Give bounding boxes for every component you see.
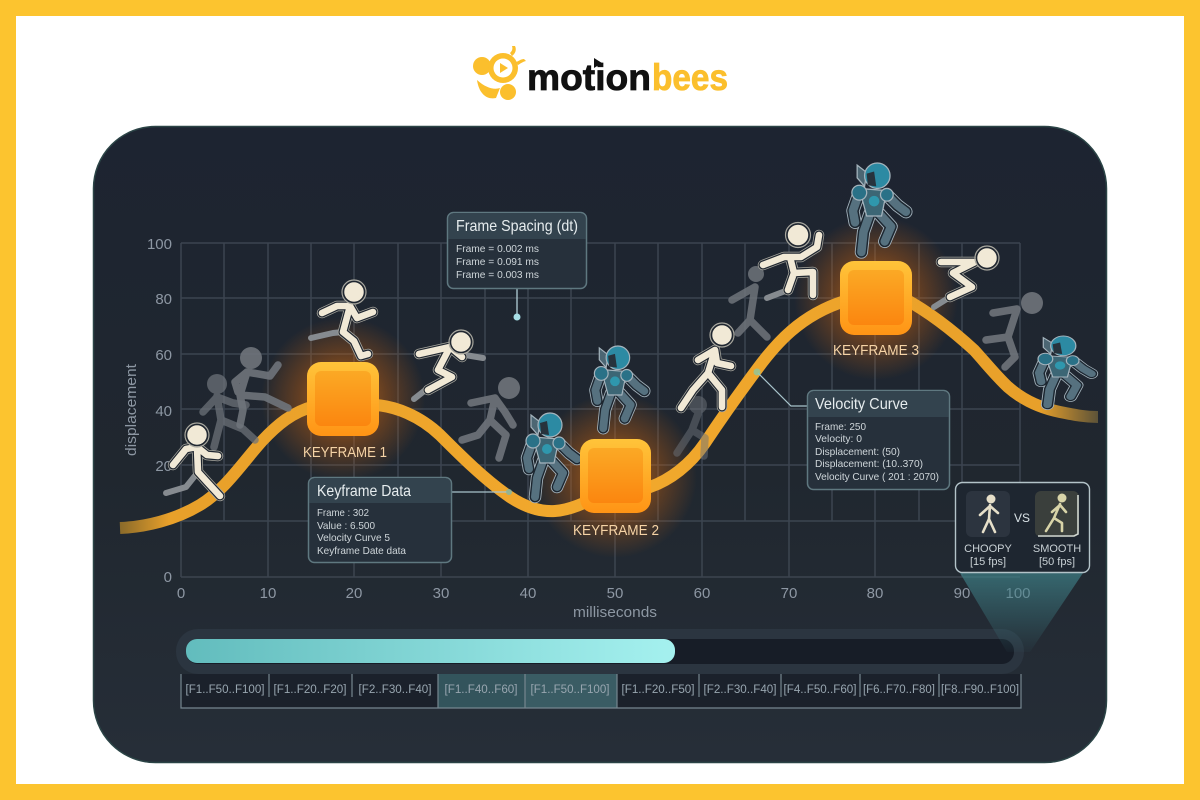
dark chart panel xyxy=(94,126,1106,762)
runner: before keyframe 3 xyxy=(763,222,819,298)
progress track xyxy=(176,629,1024,674)
x axis labels: 10 xyxy=(260,585,276,602)
callout: velocity curve: Velocity Curve xyxy=(815,396,908,413)
logo: motionbees xyxy=(473,46,728,100)
frame range strip: [F1..F50..F100] xyxy=(530,684,610,696)
choppy label: [15 fps] xyxy=(970,556,1006,568)
choppy tile xyxy=(966,491,1010,537)
frame range strip: [F2..F30..F40] xyxy=(704,684,776,696)
callout: keyframe data: Keyframe Data xyxy=(317,483,411,500)
frame range strip: [F1..F40..F60] xyxy=(444,684,518,696)
x axis labels: 60 xyxy=(694,585,710,602)
callout: velocity curve: Frame: 250 xyxy=(815,421,866,433)
keyframe 3 label: KEYFRAME 3 xyxy=(833,342,919,359)
x axis labels xyxy=(177,585,1031,602)
frame range strip: [F1..F50..F100] xyxy=(186,684,264,696)
frame range strip xyxy=(181,674,1021,708)
x axis labels: 50 xyxy=(607,585,623,602)
keyframe glows xyxy=(261,216,958,558)
y axis labels: 60 xyxy=(155,347,172,364)
robot before keyframe 2 xyxy=(526,413,577,497)
y axis labels xyxy=(147,236,172,586)
robot crouching right xyxy=(1038,336,1092,405)
callout: frame spacing xyxy=(448,212,586,320)
y axis labels: 100 xyxy=(147,236,172,253)
ghost runner right xyxy=(986,292,1043,367)
x axis title: milliseconds xyxy=(573,604,657,621)
runner: descending xyxy=(414,330,483,399)
smooth tile xyxy=(1035,491,1079,537)
callout: frame spacing: Frame = 0.002 ms xyxy=(456,243,539,255)
progress track inner xyxy=(186,639,1014,664)
logo word motion: motion xyxy=(527,57,651,98)
x axis labels: 90 xyxy=(954,585,970,602)
runner: start xyxy=(166,423,220,496)
callout: velocity curve xyxy=(754,368,950,490)
smooth label: SMOOTH xyxy=(1033,543,1081,555)
x axis labels: 30 xyxy=(433,585,449,602)
x axis labels: 40 xyxy=(520,585,536,602)
x axis labels: 0 xyxy=(177,585,185,602)
y axis title: displacement xyxy=(123,363,140,456)
grid xyxy=(181,243,1020,577)
callout: frame spacing: Frame = 0.003 ms xyxy=(456,269,539,281)
callout: velocity curve: Velocity Curve ( 201 : 2070) xyxy=(815,471,939,483)
runner: climbing xyxy=(681,323,734,408)
comparison box: choppy vs smooth xyxy=(956,482,1090,572)
funnel from comparison to track end xyxy=(960,573,1083,652)
frame range strip: [F1..F20..F20] xyxy=(274,684,346,696)
x axis labels: 20 xyxy=(346,585,362,602)
callout: velocity curve: Displacement: (10..370) xyxy=(815,458,923,470)
ghost runner climbing xyxy=(732,266,767,337)
logo word bees: bees xyxy=(652,57,728,98)
smooth label: [50 fps] xyxy=(1039,556,1075,568)
frame range strip: [F4..F50..F60] xyxy=(784,684,856,696)
ghost runner left 1 xyxy=(203,374,255,447)
keyframe 2 label: KEYFRAME 2 xyxy=(573,522,659,539)
x axis labels: 100 xyxy=(1005,585,1031,602)
keyframe 1 xyxy=(307,362,379,436)
y axis labels: 80 xyxy=(155,291,172,308)
callout: keyframe data: Value : 6.500 xyxy=(317,520,375,532)
frame range strip: [F2..F30..F40] xyxy=(358,684,432,696)
keyframe 3 xyxy=(840,261,912,335)
logo play mark xyxy=(594,58,602,68)
callout: velocity curve: Displacement: (50) xyxy=(815,446,900,458)
runner: above keyframe 1 xyxy=(311,280,373,356)
callout: velocity curve: Velocity: 0 xyxy=(815,433,862,445)
ghost runner descending xyxy=(462,377,520,458)
choppy label: CHOOPY xyxy=(964,543,1012,555)
keyframe 1 label: KEYFRAME 1 xyxy=(303,444,387,461)
ghost runner left 2 xyxy=(235,347,288,425)
callout: frame spacing: Frame = 0.091 ms xyxy=(456,256,539,268)
callout: keyframe data: Keyframe Date data xyxy=(317,545,406,557)
robot above keyframe 2 xyxy=(594,346,644,428)
y axis labels: 40 xyxy=(155,403,172,420)
callout: keyframe data: Frame : 302 xyxy=(317,507,369,519)
frame range strip: [F6..F70..F80] xyxy=(863,684,935,696)
callout: frame spacing: Frame Spacing (dt) xyxy=(456,218,578,235)
x axis labels: 80 xyxy=(867,585,883,602)
y axis labels: 0 xyxy=(164,569,172,586)
y axis labels: 20 xyxy=(155,458,172,475)
callout: keyframe data: Velocity Curve 5 xyxy=(317,532,390,544)
progress fill xyxy=(186,639,675,663)
keyframe 2 xyxy=(580,439,651,513)
vs label: VS xyxy=(1014,511,1030,525)
frame range strip: [F8..F90..F100] xyxy=(941,684,1019,696)
x axis labels: 70 xyxy=(781,585,797,602)
frame range strip: [F1..F20..F50] xyxy=(622,684,694,696)
ghost runner low xyxy=(677,396,707,456)
icon: bee xyxy=(473,46,526,100)
callout: keyframe data xyxy=(308,478,512,562)
animation curve xyxy=(120,299,1098,528)
runner: after keyframe 3 xyxy=(934,246,999,307)
robot above keyframe 3 xyxy=(852,163,906,252)
